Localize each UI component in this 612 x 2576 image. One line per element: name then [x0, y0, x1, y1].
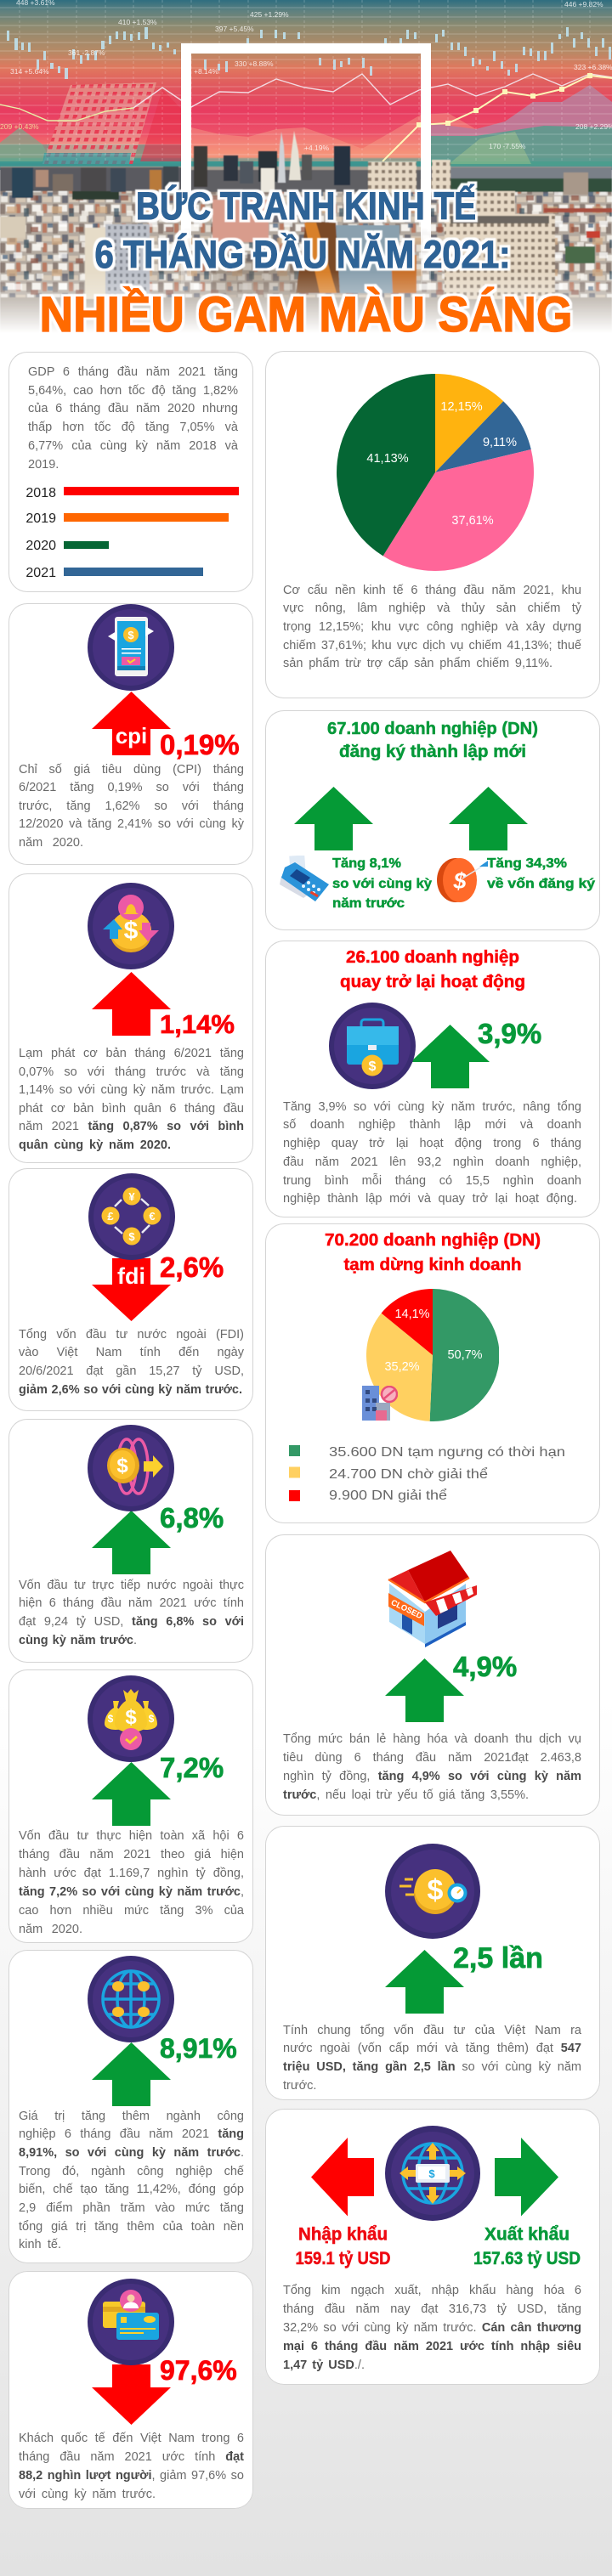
arrow: import left: [311, 2138, 374, 2217]
line charts: [0, 73, 612, 161]
bar chart: GDP by year: 2021: [26, 566, 56, 580]
icon: currency cycle: £: [107, 1210, 114, 1223]
text: structure: chiếm 37,61%; khu vực dịch vụ chiếm 41,13%; thuế: [283, 639, 581, 652]
text: industry: Trong đó, ngành công nghiệp chế: [19, 2165, 244, 2178]
icon: briefcase: [329, 1003, 416, 1089]
label: import: [291, 2223, 397, 2274]
text: retail: [283, 1730, 581, 1805]
title: BỨC TRANH KINH TẾ: [136, 184, 476, 228]
panel: tourism: [8, 2271, 253, 2509]
text: trade: Tổng kim ngạch xuất, nhập khẩu hàng hóa 6: [283, 2284, 581, 2297]
text: trade: 32,2% so với cùng kỳ năm trước. Cán cân thương: [283, 2321, 581, 2335]
icon: phone payment: $: [128, 629, 134, 641]
text: outward: nước ngoài (vốn cấp mới và tăng thêm) đạt 547: [283, 2042, 581, 2055]
text: increase 34,3%: [487, 856, 595, 891]
icon: money bags: $: [108, 1713, 114, 1725]
icon: closed building: [362, 1386, 398, 1421]
icon: globe: [88, 1956, 174, 2042]
icon: coin bell: $: [124, 917, 139, 945]
icon: globe with money: [385, 2126, 480, 2221]
header banner: city and stock charts: [0, 0, 612, 340]
text: FDI: 20/6/2021 đạt gần 15,27 tỷ USD,: [19, 1364, 244, 1378]
arrow: up CPI: [92, 692, 171, 755]
text: returning: số doanh nghiệp thành lập mới và doanh: [283, 1118, 581, 1132]
label: cpi: cpi: [116, 723, 147, 749]
text: retail: Tổng mức bán lẻ hàng hóa và doanh thu dịch vụ: [283, 1731, 581, 1745]
text: FDI: giảm 2,6% so với cùng kỳ năm trước.: [19, 1383, 242, 1397]
arrow: up returning: [412, 1025, 490, 1088]
stock chart labels: 425 +1.29%: [250, 10, 289, 19]
text: disbursed: hiện 6 tháng đầu năm 2021 ước tính: [19, 1596, 244, 1610]
pie chart: suspended: 35,2%: [384, 1360, 420, 1374]
arrow: up industry: [92, 2042, 171, 2106]
panel: new enterprises: [265, 710, 600, 930]
stock chart labels: 314 +5.64%: [10, 67, 49, 76]
panel: economic structure: [265, 351, 600, 698]
heading: new enterprises: đăng ký thành lập mới: [339, 743, 526, 761]
stock chart labels: 330 +8.88%: [235, 59, 274, 68]
icon: money bags: [88, 1675, 174, 1762]
icon: orange coin with dart: [437, 858, 488, 902]
heading: new enterprises: [327, 720, 538, 761]
icon: coin with stopwatch: $: [428, 1874, 444, 1907]
text: trade: mại 6 tháng đầu năm 2021 ước tính nhập siêu: [283, 2340, 581, 2353]
value: 0,19%: 0,19%: [160, 729, 240, 760]
text: increase 8,1%: [332, 856, 432, 911]
heading: suspended enterprises: [325, 1231, 541, 1274]
bar chart: GDP by year: [26, 486, 239, 580]
heading: suspended enterprises: 70.200 doanh nghiệp (DN): [325, 1231, 541, 1250]
text: FDI: Tổng vốn đầu tư nước ngoài (FDI): [19, 1327, 244, 1341]
text: structure: Cơ cấu nền kinh tế 6 tháng đầu năm 2021, khu: [283, 583, 581, 596]
text: industry: 8,91%, so với cùng kỳ năm trước.: [19, 2146, 244, 2160]
value: 3,9%: 3,9%: [478, 1018, 541, 1049]
text: industry: nghiệp 6 tháng đầu năm 2021 tăng: [19, 2127, 244, 2141]
text: investment: [19, 1828, 244, 1935]
stock chart labels: [0, 0, 612, 152]
heading: suspended enterprises: tạm dừng kinh doanh: [343, 1256, 522, 1274]
panel: core inflation: [8, 873, 253, 1163]
panel: retail: [265, 1534, 600, 1816]
arrow: export right: [495, 2138, 558, 2217]
value: 7,2%: 7,2%: [160, 1752, 224, 1783]
icon: store: [388, 1551, 479, 1649]
label: export: Xuất khẩu: [484, 2225, 570, 2245]
text: CPI: Chỉ số giá tiêu dùng (CPI) tháng: [19, 763, 244, 777]
heading: returning enterprises: 26.100 doanh nghiệp: [346, 948, 519, 967]
stock chart labels: 209 +0.43%: [0, 122, 39, 131]
legend: 35.600 DN tạm ngưng có thời hạn: [329, 1445, 565, 1460]
panel: CPI: [8, 603, 253, 865]
text: CPI: [19, 763, 244, 850]
stock chart labels: +8.14%: [194, 67, 219, 76]
text: outward: trước.: [283, 2079, 316, 2093]
icon: coin with stopwatch: [385, 1844, 480, 1939]
text: GDP: GDP 6 tháng đầu năm 2021 tăng: [28, 365, 238, 379]
bar chart: GDP by year: 2018: [26, 486, 56, 500]
text: trade: [283, 2281, 581, 2375]
text: disbursed: Vốn đầu tư trực tiếp nước ngoài thực: [19, 1579, 244, 1592]
arrow: down FDI: [92, 1258, 171, 1321]
text: industry: kinh tế.: [19, 2238, 61, 2251]
text: GDP: thấp hơn tốc độ tăng 7,05% và: [28, 421, 238, 434]
icon: currency cycle: €: [149, 1210, 156, 1223]
panel: FDI disbursed: [8, 1419, 253, 1663]
text: tourism: với cùng kỳ năm trước.: [19, 2488, 156, 2501]
value: 1,14%: 1,14%: [160, 1009, 235, 1039]
text: industry: tổng giá trị tăng thêm của toàn nền: [19, 2220, 244, 2234]
icon: currency cycle: ¥: [128, 1190, 135, 1203]
legend: [265, 1440, 600, 1512]
text: outward: triệu USD, tăng gần 2,5 lần so với cùng kỳ năm: [283, 2060, 581, 2074]
value: 6,8%: 6,8%: [160, 1502, 224, 1534]
arrow: up outward: [385, 1949, 464, 2014]
text: returning: nghiệp thành lập mới và quay trở lại hoạt động.: [283, 1192, 577, 1206]
heading: returning enterprises: quay trở lại hoạt động: [340, 973, 525, 991]
title: 6 THÁNG ĐẦU NĂM 2021:: [95, 233, 510, 276]
text: retail: trước, nếu loại trừ yếu tố giá tăng 3,55%.: [283, 1788, 529, 1801]
value: 4,9%: 4,9%: [453, 1651, 517, 1682]
title: [39, 184, 573, 342]
label: import: Nhập khẩu: [298, 2225, 388, 2245]
panel: suspended enterprises: [265, 1223, 600, 1523]
stock chart labels: 170 -7.55%: [489, 142, 526, 150]
text: disbursed: [19, 1579, 244, 1647]
text: structure: vực nông, lâm nghiệp và thủy sản chiếm tỷ: [283, 602, 581, 615]
text: tourism: Khách quốc tế đến Việt Nam trong 6: [19, 2432, 244, 2445]
stock grid lines: [0, 0, 612, 161]
text: GDP: 6,77% của cùng kỳ năm 2018 và: [28, 439, 238, 453]
icon: currency cycle: $: [128, 1230, 135, 1243]
text: GDP: [28, 365, 238, 472]
text: CPI: trước, tăng 1,62% so với tháng: [19, 799, 244, 813]
panel: industry: [8, 1950, 253, 2263]
text: industry: Giá trị tăng thêm ngành công: [19, 2109, 244, 2122]
panel: FDI: [8, 1168, 253, 1411]
arrow: up retail: [385, 1658, 464, 1722]
pie chart: suspended: 14,1%: [394, 1308, 430, 1321]
text: disbursed: cùng kỳ năm trước.: [19, 1634, 137, 1647]
legend: 24.700 DN chờ giải thể: [329, 1466, 488, 1482]
stock chart labels: 446 +9.82%: [564, 0, 604, 8]
text: returning: nghiệp quay trở lại hoạt động trong 6 tháng: [283, 1137, 581, 1150]
text: investment: tăng 7,2% so với cùng kỳ năm trước,: [19, 1884, 244, 1898]
stock chart labels: 397 +5.45%: [215, 25, 254, 33]
pie chart: structure: 41,13%: [366, 452, 409, 466]
icon: orange coin with dart: $: [452, 868, 467, 894]
text: retail: tiêu dùng 6 tháng đầu năm 2021đạt 2.463,8: [283, 1750, 581, 1764]
text: increase 8,1%: so với cùng kỳ: [332, 877, 432, 891]
text: CPI: 6/2021 tăng 0,19% so với tháng: [19, 781, 244, 794]
arrow: up 8,1%: [294, 787, 373, 850]
white frame: [181, 43, 431, 296]
text: GDP: 2019.: [28, 458, 59, 472]
icon: coin bell: [88, 883, 174, 969]
text: outward: [283, 2022, 581, 2096]
text: industry: [19, 2109, 244, 2251]
icon: cards and visitor: [88, 2279, 174, 2365]
text: trade: tháng đầu năm nay đạt 316,73 tỷ USD, tăng: [283, 2302, 581, 2316]
text: disbursed: đạt 9,24 tỷ USD, tăng 6,8% so với: [19, 1615, 244, 1629]
text: core inflation: Lạm phát cơ bản tháng 6/2021 tăng: [19, 1047, 244, 1060]
text: retail: nghìn tỷ đồng, tăng 4,9% so với cùng kỳ năm: [283, 1769, 581, 1782]
label: export: [469, 2223, 585, 2274]
text: trade: 1,47 tỷ USD./.: [283, 2359, 365, 2372]
text: core inflation: [19, 1047, 244, 1152]
icon: phone payment: [88, 604, 174, 691]
icon: coin through rings: [88, 1425, 174, 1511]
text: tourism: tháng đầu năm 2021 ước tính đạt: [19, 2450, 244, 2464]
text: structure: trọng 12,15%; khu vực công nghiệp và xây dựng: [283, 620, 581, 634]
heading: returning enterprises: [340, 948, 525, 991]
pie chart: structure: 12,15%: [440, 400, 483, 414]
text: GDP: 5,64%, cao hơn tốc độ tăng 1,82%: [28, 384, 238, 398]
arrow: up 34,3%: [449, 787, 528, 850]
text: investment: cao hơn nhiều mức tăng 3% của: [19, 1903, 244, 1917]
pie chart: structure: 9,11%: [483, 436, 517, 449]
text: returning: Tăng 3,9% so với cùng kỳ năm trước, nâng tổng: [283, 1099, 581, 1113]
panel: returning enterprises: [265, 941, 600, 1217]
value: 97,6%: 97,6%: [160, 2355, 237, 2386]
text: returning: đầu năm 2021 lên 93,2 nghìn doanh nghiệp,: [283, 1155, 581, 1169]
value: 8,91%: 8,91%: [160, 2033, 237, 2064]
text: GDP: của 6 tháng đầu năm 2020 nhưng: [28, 402, 238, 415]
arrow: up inflation: [92, 972, 171, 1036]
icon: money bags: $: [125, 1706, 137, 1729]
arrow: up investment: [92, 1762, 171, 1826]
text: increase 8,1%: năm trước: [332, 896, 405, 911]
icon: briefcase: $: [369, 1059, 377, 1074]
text: structure: sản phẩm trừ trợ cấp sản phẩm chiếm 9,11%.: [283, 657, 552, 670]
icon: money bags: $: [149, 1713, 155, 1725]
icon: store: CLOSED: [389, 1598, 424, 1621]
panel: social investment: [8, 1669, 253, 1943]
text: investment: tháng đầu năm 2021 theo giá hiện: [19, 1847, 244, 1861]
text: increase 34,3%: về vốn đăng ký: [487, 877, 595, 891]
text: tourism: 88,2 nghìn lượt người, giảm 97,6% so: [19, 2469, 244, 2483]
text: outward: Tính chung tổng vốn đầu tư của Việt Nam ra: [283, 2024, 581, 2037]
pie chart: structure: [337, 374, 534, 571]
text: investment: Vốn đầu tư thực hiện toàn xã hội 6: [19, 1828, 244, 1842]
value: 2,5 lần: 2,5 lần: [453, 1942, 543, 1974]
panel: trade: [265, 2109, 600, 2385]
icon: globe with money: $: [428, 2167, 435, 2180]
icon: coin through rings: $: [116, 1455, 128, 1477]
value: 2,6%: 2,6%: [160, 1251, 224, 1283]
icon: currency cycle: [88, 1173, 175, 1260]
text: returning: trung bình mỗi tháng có 15,5 nghìn doanh: [283, 1174, 581, 1188]
text: core inflation: năm 2021 tăng 0,87% so với bình: [19, 1120, 244, 1133]
text: core inflation: 1,14% so với cùng kỳ năm trước. Lạm: [19, 1083, 244, 1097]
arrow: down tourism: [92, 2364, 171, 2425]
area chart overlays: [0, 85, 612, 166]
label: fdi: fdi: [117, 1263, 145, 1289]
pie chart: structure: 37,61%: [451, 514, 494, 528]
text: increase 8,1%: Tăng 8,1%: [332, 856, 401, 871]
text: CPI: 12/2020 và tăng 2,41% so với cùng kỳ: [19, 817, 244, 831]
arrow: up disbursed: [92, 1511, 171, 1574]
text: investment: năm 2020.: [19, 1922, 82, 1935]
text: core inflation: phát cơ bản bình quân 6 tháng đầu: [19, 1102, 244, 1116]
stock chart labels: +4.19%: [304, 144, 330, 152]
text: core inflation: quân cùng kỳ năm 2020.: [19, 1138, 171, 1152]
candlestick chart: [7, 27, 611, 79]
panel: outward investment: [265, 1826, 600, 2100]
text: tourism: [19, 2432, 244, 2501]
pie chart: suspended: 50,7%: [447, 1348, 483, 1362]
heading: new enterprises: 67.100 doanh nghiệp (DN): [327, 720, 538, 738]
bar chart: GDP by year: 2019: [26, 511, 56, 526]
text: industry: 2,9 điểm phần trăm vào mức tăng: [19, 2201, 244, 2215]
text: investment: hành ước đạt 1.169,7 nghìn tỷ đồng,: [19, 1866, 244, 1879]
text: industry: biến, chế tạo tăng 11,42%, đóng góp: [19, 2183, 244, 2196]
stock chart labels: 410 +1.53%: [118, 18, 157, 26]
icon: card terminal: [280, 856, 329, 901]
panel: GDP growth: [8, 352, 253, 592]
stock chart labels: 361 -2.87%: [68, 48, 105, 57]
text: CPI: năm 2020.: [19, 836, 83, 850]
cityscape: [0, 131, 612, 340]
pie chart: suspended: [366, 1289, 499, 1421]
text: increase 34,3%: Tăng 34,3%: [487, 856, 567, 871]
text: core inflation: 0,07% so với tháng trước và tăng: [19, 1065, 244, 1079]
text: structure: [283, 583, 581, 670]
text: returning: [283, 1099, 581, 1206]
text: FDI: vào Việt Nam tính đến ngày: [19, 1346, 244, 1359]
stock chart labels: 323 +6.38%: [574, 63, 612, 71]
text: FDI: [19, 1327, 244, 1397]
legend: 9.900 DN giải thể: [329, 1488, 447, 1503]
bar chart: GDP by year: 2020: [26, 539, 56, 552]
